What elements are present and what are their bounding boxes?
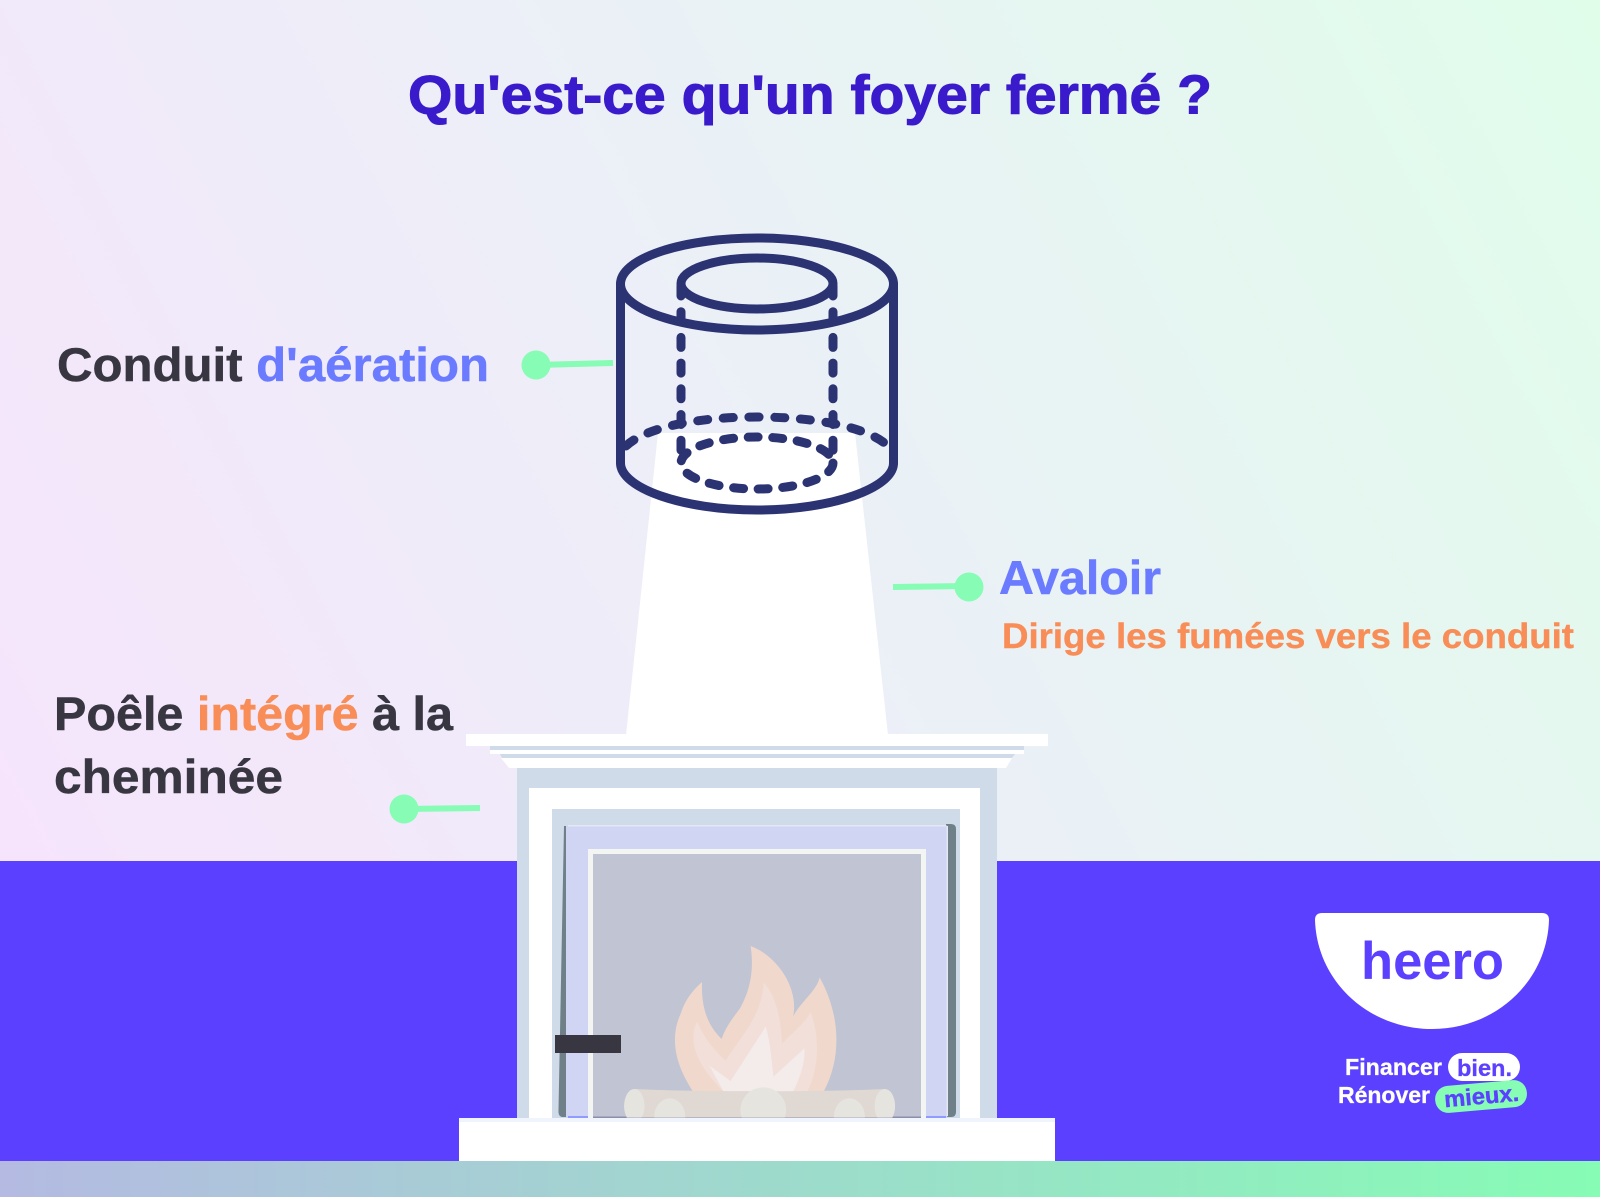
firebox recess [552, 809, 960, 1118]
connector: avaloir [893, 572, 984, 602]
logo wordmark: heero [1361, 932, 1504, 991]
tagline: Financer [1345, 1054, 1442, 1080]
connector: conduit [522, 350, 613, 380]
connector: poêle [390, 794, 480, 824]
floor band [0, 861, 1600, 1161]
mantel moulding [490, 746, 1024, 768]
hearth base [459, 1118, 1055, 1161]
door handle [555, 1035, 621, 1053]
white surround [529, 788, 980, 1118]
label: avaloir: Avaloir [999, 551, 1161, 604]
label: poêle intégré: cheminée [54, 750, 283, 803]
fireplace [459, 734, 1055, 1161]
sublabel: avaloir description: Dirige les fumées vers le conduit [1002, 617, 1574, 656]
icon: ventilation duct [620, 238, 894, 510]
tagline: Rénover [1338, 1082, 1430, 1108]
bottom gradient bar [0, 1161, 1600, 1197]
label: conduit d'aération: Conduit d'aération [57, 338, 489, 391]
chimney wall [517, 768, 997, 1118]
logo badge [1315, 913, 1549, 1029]
title: Qu'est-ce qu'un foyer fermé ? [408, 64, 1212, 126]
mantel shelf [466, 734, 1048, 746]
flame and logs [624, 946, 895, 1135]
label: poêle intégré [54, 687, 454, 803]
logo: heero [1315, 913, 1549, 1114]
flame [675, 946, 836, 1092]
tagline: mieux. [1443, 1080, 1520, 1112]
background [0, 0, 1600, 861]
tagline: bien. [1457, 1055, 1512, 1081]
hood: avaloir [626, 433, 888, 735]
logs [624, 1088, 895, 1118]
stove door [558, 824, 956, 1118]
tagline [1338, 1053, 1528, 1114]
label: poêle intégré: Poêle intégré à la [54, 687, 454, 740]
